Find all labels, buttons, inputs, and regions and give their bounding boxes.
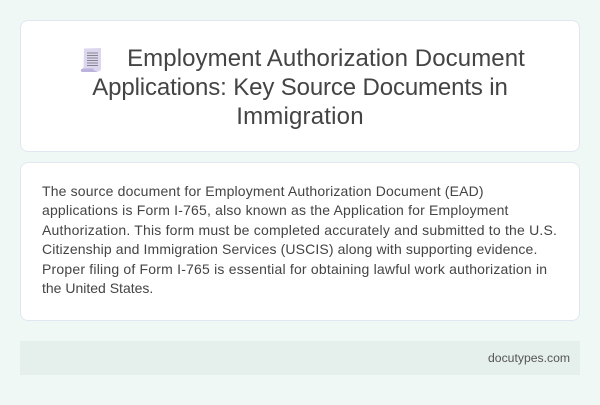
heading: Applications: Key Source Documents in	[92, 74, 508, 101]
text block: description: Citizenship and Immigration Services (USCIS) along with supporting evidence.	[42, 241, 537, 257]
text block: description: the United States.	[42, 280, 153, 296]
panel: description card	[20, 162, 580, 321]
heading	[92, 45, 525, 130]
text block: description: Proper filing of Form I-765 is essential for obtaining lawful work authorization in	[42, 261, 547, 277]
icon: document scroll	[80, 48, 101, 72]
text block: description: applications is Form I-765, also known as the Application for Employment	[42, 202, 509, 218]
footer: source	[20, 341, 580, 375]
text block: description: Authorization. This form must be completed accurately and submitted to the U.S.	[42, 222, 557, 238]
heading: Employment Authorization Document	[127, 45, 525, 72]
heading: Immigration	[236, 103, 364, 130]
text block: description: The source document for Employment Authorization Document (EAD)	[42, 183, 484, 199]
footer: source: docutypes.com	[488, 351, 570, 365]
text block: description	[42, 183, 557, 296]
panel: title card	[20, 20, 580, 152]
